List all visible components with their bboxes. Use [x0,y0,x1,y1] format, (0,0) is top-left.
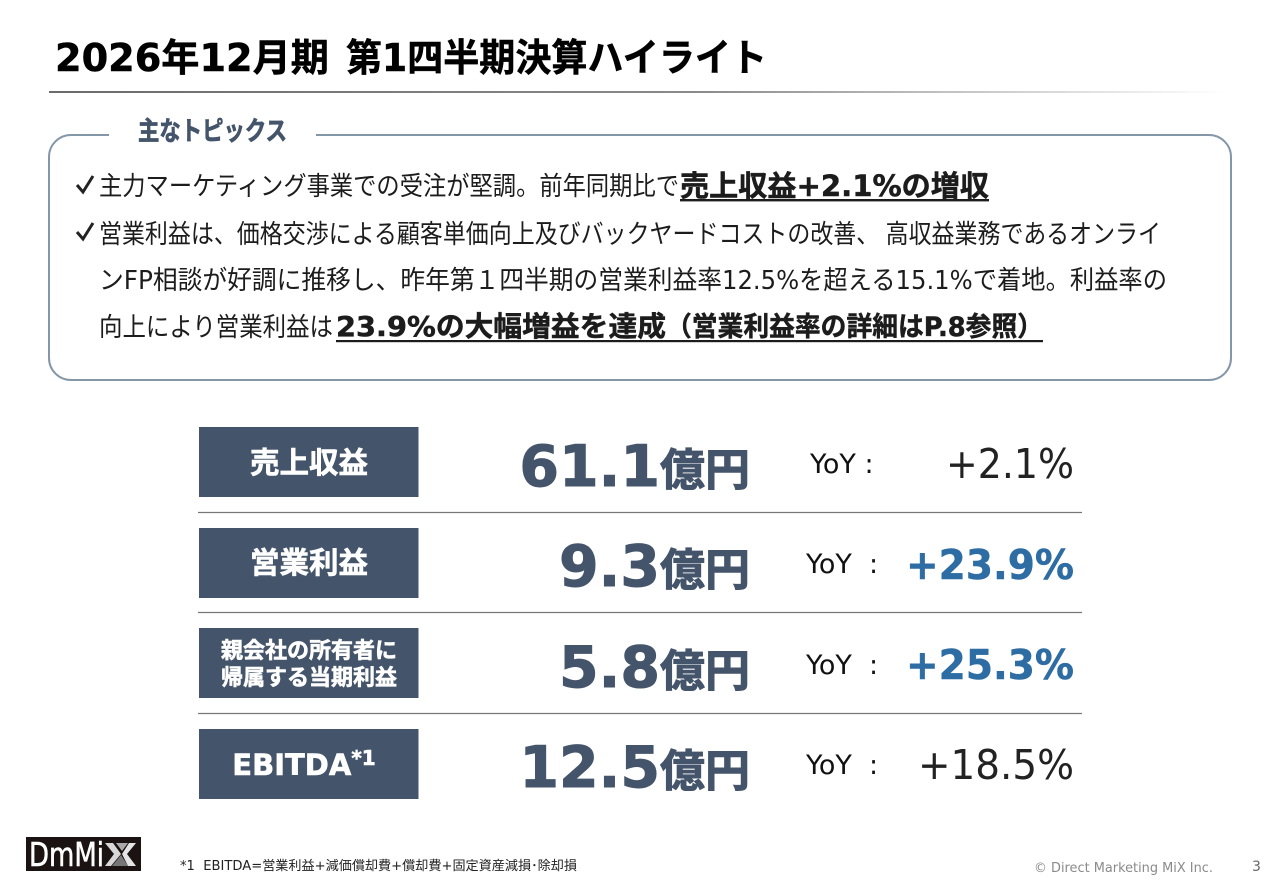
yoy: EBITDA: : [869,750,878,781]
yoy: net profit: YoY [805,650,852,681]
panel heading: 主なトピックス [138,116,287,146]
footnote: *1 EBITDA=営業利益+減価償却費+償却費+固定資産減損･除却損 [180,858,577,874]
value: revenue: 61.1 [519,434,660,500]
yoy: EBITDA [805,741,1074,789]
topic 1: 売上収益+2.1%の増収 [680,169,989,203]
title: 2026年12月期 [55,36,329,80]
yoy: revenue: YoY : [809,449,874,480]
yoy: revenue: +2.1% [946,440,1074,488]
value: operating profit [559,534,750,600]
label: operating profit: 営業利益 [250,547,368,580]
yoy: net profit [805,641,1074,689]
label: EBITDA: *1 [351,746,376,770]
topic 2: （営業利益率の詳細はP.8参照） [666,312,1043,343]
yoy: EBITDA: YoY [805,750,852,781]
value: net profit: 億円 [660,647,750,696]
row: EBITDA [199,729,1074,801]
value: revenue [519,434,750,500]
yoy: net profit: : [869,650,878,681]
label: net profit [199,628,418,698]
yoy: EBITDA: +18.5% [918,741,1074,789]
topic 2: 営業利益は、価格交渉による顧客単価向上及びバックヤードコストの改善、 高収益業務であるオンライ [99,219,1161,249]
topic 2: 23.9%の大幅増益を達成 [336,310,666,343]
value: net profit [559,635,750,701]
value: revenue: 億円 [660,446,750,495]
label: revenue [199,427,418,497]
topic 2: 12.5%を超える15.1%で着地。利益率の [722,266,1167,296]
yoy: operating profit: YoY [805,549,852,580]
yoy: revenue [809,440,1074,488]
yoy: net profit: +25.3% [906,641,1074,689]
row: net profit [199,628,1074,701]
title underline [49,91,1225,93]
logo: DmMiX: DmMi [29,835,104,874]
label: EBITDA: EBITDA [232,748,351,782]
yoy: operating profit: +23.9% [906,541,1074,589]
panel frame [49,135,1231,380]
topic 2: 向上により営業利益は [99,312,333,342]
page number: 3 [1252,859,1261,875]
label: operating profit [199,528,418,598]
row: revenue [199,427,1074,500]
yoy: operating profit: : [869,549,878,580]
value: net profit: 5.8 [559,635,660,701]
title: 第1四半期決算ハイライト [346,36,767,80]
row: operating profit [199,528,1074,600]
title [55,36,767,80]
value: EBITDA [519,735,750,801]
label: revenue: 売上収益 [250,447,368,480]
topic 2 [77,219,1167,343]
topic 2: ンFP相談が好調に推移し、昨年第１四半期の営業利益率 [99,266,722,296]
panel: main topics [49,116,1231,380]
value: operating profit: 億円 [660,546,750,595]
value: operating profit: 9.3 [559,534,660,600]
label: net profit: 親会社の所有者に [221,638,397,663]
value: EBITDA: 億円 [660,747,750,796]
copyright: © Direct Marketing MiX Inc. [1034,860,1213,876]
topic 1: 主力マーケティング事業での受注が堅調。前年同期比で [99,171,679,201]
topic 1 [77,169,989,203]
value: EBITDA: 12.5 [519,735,660,801]
yoy: operating profit [805,541,1074,589]
label: EBITDA [199,729,418,799]
label: net profit: 帰属する当期利益 [221,665,397,690]
